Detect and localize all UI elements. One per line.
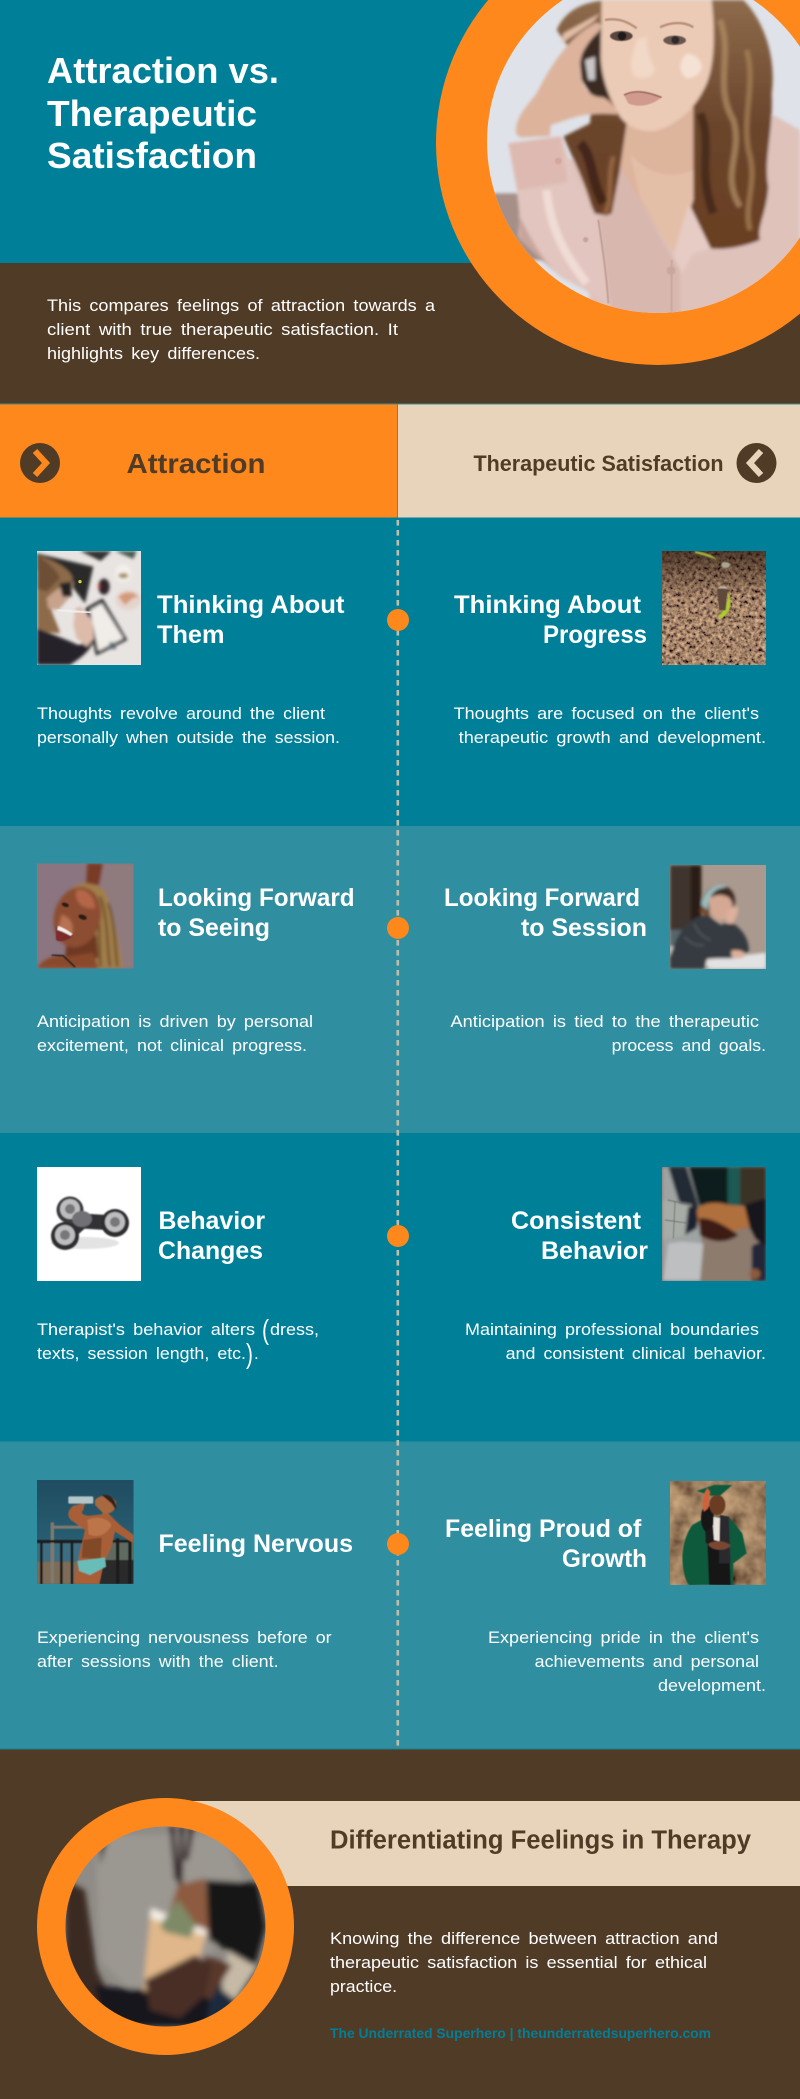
text: satisfaction pride: Experiencing pride in the client's — [488, 1628, 759, 1647]
heading: looking forward to session: Looking Forward — [444, 884, 640, 912]
text: attraction anticipation — [37, 1012, 313, 1055]
intro text: This compares feelings of attraction towards a — [47, 297, 436, 315]
image: woman at desk — [37, 551, 141, 665]
panel: row 1 thinking — [0, 518, 800, 826]
text: attraction behavior: Therapist's behavior alters — [37, 1320, 255, 1339]
image: handshake — [662, 1167, 766, 1281]
heading: looking forward to session: to Session — [521, 914, 647, 942]
image: fidget spinner — [37, 1167, 141, 1281]
heading: feeling nervous: Feeling Nervous — [158, 1530, 353, 1558]
orange ring with photo — [37, 1798, 294, 2055]
conclusion text: practice. — [330, 1977, 397, 1996]
heading: thinking about progress: Thinking About — [454, 591, 642, 619]
title — [47, 50, 279, 176]
conclusion text: Knowing the difference between attraction and — [330, 1929, 718, 1948]
panel: header — [0, 0, 800, 404]
heading: behavior changes — [158, 1207, 265, 1265]
text: attraction behavior — [37, 1314, 319, 1369]
orange ring with portrait — [436, 0, 800, 365]
heading: attraction: Attraction — [126, 448, 266, 479]
text: attraction nervousness: Experiencing nervousness before or — [37, 1628, 332, 1647]
text: attraction behavior: texts, session length, etc. — [37, 1344, 246, 1363]
panel: column headers — [0, 404, 800, 518]
panel: row 2 looking forward — [0, 826, 800, 1133]
text: satisfaction behavior — [465, 1320, 766, 1363]
text: satisfaction behavior: and consistent clinical behavior. — [506, 1344, 766, 1363]
text: attraction behavior: dress, — [270, 1320, 319, 1339]
text: attraction behavior: . — [254, 1344, 259, 1363]
heading: thinking about them: Thinking About — [157, 591, 345, 619]
heading: looking forward to session — [444, 884, 647, 942]
heading: behavior changes: Behavior — [158, 1207, 265, 1235]
footer credit: The Underrated Superhero | theunderratedsuperhero.com — [330, 2025, 711, 2041]
text: satisfaction anticipation: Anticipation is tied to the therapeutic — [450, 1012, 760, 1031]
heading: therapeutic satisfaction: Therapeutic Satisfaction — [474, 451, 724, 476]
heading: behavior changes: Changes — [158, 1237, 263, 1265]
panel: conclusion — [0, 1748, 800, 2055]
heading: looking forward to seeing: to Seeing — [158, 914, 270, 942]
center timeline with dots — [387, 520, 409, 1749]
text: attraction thoughts — [37, 704, 340, 747]
heading: consistent behavior: Consistent — [511, 1207, 642, 1235]
text: satisfaction behavior: Maintaining professional boundaries — [465, 1320, 759, 1339]
text: satisfaction thoughts: therapeutic growth and development. — [459, 728, 766, 747]
conclusion text — [330, 1929, 718, 1996]
intro text — [47, 297, 436, 363]
heading: consistent behavior — [511, 1207, 648, 1265]
text: attraction nervousness: after sessions with the client. — [37, 1652, 279, 1671]
icon: right chevron — [20, 443, 60, 483]
text: attraction thoughts: Thoughts revolve around the client — [37, 704, 325, 723]
intro text: client with true therapeutic satisfaction. It — [47, 321, 398, 339]
heading: looking forward to seeing: Looking Forward — [158, 884, 355, 912]
text: attraction behavior: ) — [246, 1338, 253, 1369]
panel: row 3 behavior — [0, 1133, 800, 1442]
text: satisfaction pride: achievements and personal — [535, 1652, 759, 1671]
image: woman at table with headphones — [670, 865, 766, 969]
heading: thinking about progress: Progress — [543, 621, 647, 649]
text: satisfaction anticipation: process and goals. — [612, 1036, 766, 1055]
text: satisfaction pride: development. — [658, 1676, 766, 1695]
title: Satisfaction — [47, 135, 257, 176]
text: attraction anticipation: excitement, not clinical progress. — [37, 1036, 307, 1055]
text: satisfaction thoughts — [454, 704, 766, 747]
image: seedling in soil — [662, 551, 766, 665]
heading: thinking about them: Them — [157, 621, 224, 649]
heading: feeling proud of growth: Growth — [562, 1545, 647, 1573]
conclusion heading: Differentiating Feelings in Therapy — [330, 1827, 752, 1855]
text: attraction behavior: ( — [262, 1314, 270, 1345]
panel: row 4 feelings — [0, 1442, 800, 1749]
icon: left chevron — [736, 443, 776, 483]
conclusion text: therapeutic satisfaction is essential for ethical — [330, 1953, 707, 1972]
heading: thinking about progress — [454, 591, 647, 649]
image: man drinking water — [37, 1480, 134, 1584]
heading band — [190, 1801, 800, 1886]
heading: consistent behavior: Behavior — [541, 1237, 648, 1265]
heading: thinking about them — [157, 591, 345, 649]
heading: feeling proud of growth: Feeling Proud of — [445, 1515, 642, 1543]
title: Attraction vs. — [47, 50, 279, 91]
text: attraction nervousness — [37, 1628, 332, 1671]
heading: looking forward to seeing — [158, 884, 355, 942]
text: satisfaction thoughts: Thoughts are focused on the client's — [454, 704, 759, 723]
title: Therapeutic — [47, 93, 257, 134]
intro text: highlights key differences. — [47, 345, 260, 363]
text: satisfaction pride — [488, 1628, 766, 1695]
text: attraction anticipation: Anticipation is driven by personal — [37, 1012, 313, 1031]
text: attraction thoughts: personally when outside the session. — [37, 728, 340, 747]
heading: feeling proud of growth — [445, 1515, 647, 1573]
image: laughing woman — [37, 864, 134, 968]
text: satisfaction anticipation — [450, 1012, 766, 1055]
image: graduate in green gown — [670, 1481, 766, 1585]
